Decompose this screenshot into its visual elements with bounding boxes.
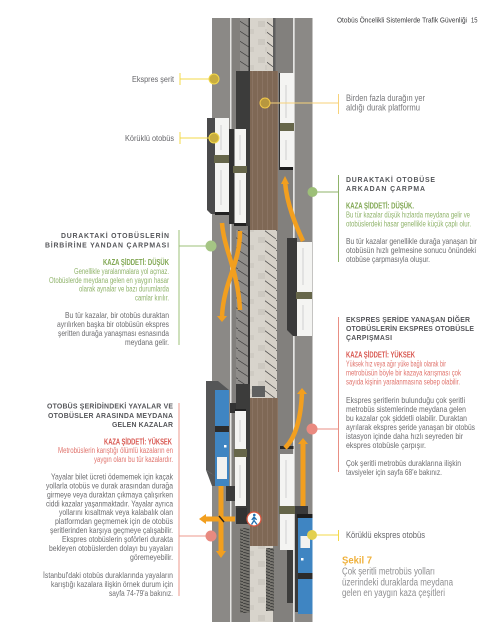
description: şeritten durağa yanaşması esnasında — [58, 328, 169, 338]
description: Bu tür kazalar, bir otobüs duraktan — [65, 310, 169, 320]
severity low: KAZA ŞİDDETİ: DÜŞÜK — [103, 258, 169, 267]
severity low: Otobüslerde meydana gelen en yaygın hasar — [49, 276, 169, 285]
figure caption: Şekil 7 — [342, 555, 372, 567]
callout: ekspres şerit: Ekspres şerit — [132, 74, 175, 84]
heading: ARKADAN ÇARPMA — [346, 186, 425, 193]
figure caption — [342, 555, 453, 599]
arrow: merging into express lane — [285, 388, 307, 448]
callout: durak platformu: aldığı durak platformu — [346, 102, 420, 112]
blue bus: left — [206, 381, 229, 486]
severity high: Yüksek hız veya ağır yüke bağlı olarak bir — [346, 360, 446, 369]
severity low: KAZA ŞİDDETİ: DÜŞÜK. — [346, 202, 414, 211]
heading: OTOBÜSLER ARASINDA MEYDANA — [48, 411, 173, 420]
recommendation reference: tavsiyeler için sayfa 68'e bakınız. — [346, 467, 442, 477]
articulated bus: upper left outer lane — [207, 118, 230, 215]
severity high — [58, 438, 173, 464]
description: metrobüs sistemlerinde meydana gelen — [346, 404, 466, 414]
description: meydana gelir. — [125, 337, 169, 347]
description: şeritlerinden karşıya geçmeye çalışabilir. — [50, 525, 173, 535]
articulated bus: lower left inner lane — [226, 409, 247, 524]
station platform bottom — [236, 398, 278, 622]
arrow: side-swipe crossing — [217, 223, 240, 322]
articulated bus: lower right inner lane — [279, 446, 295, 603]
page header: 15 — [471, 16, 478, 24]
case reference: karıştığı kazalara ilişkin örnek durum için — [51, 579, 173, 589]
callout: körüklü ekspres otobüs — [307, 529, 425, 541]
heading: EKSPRES ŞERİDE YANAŞAN DİĞER — [346, 315, 470, 324]
description: Ekspres otobüslerin şoförleri durakta — [62, 534, 173, 544]
road plan illustration — [199, 18, 312, 622]
recommendation reference: Çok şeritli metrobüs duraklarına ilişkin — [346, 458, 461, 468]
severity high: KAZA ŞİDDETİ: YÜKSEK — [346, 351, 415, 360]
description: platformdan geçmemek için de otobüs — [55, 516, 173, 526]
case reference: sayfa 74-79'a bakınız. — [109, 588, 173, 598]
arrow: rear-end collision at upper right — [281, 176, 303, 241]
station platform top — [236, 18, 278, 230]
severity low: olarak aynalar ve bazı durumlarda — [79, 285, 169, 294]
description: yollarla otobüs ve durak arasından durağa — [46, 480, 173, 490]
callout: durak platformu: Birden fazla durağın yer — [346, 92, 425, 103]
case reference: İstanbul'daki otobüs duraklarında yayaların — [43, 570, 173, 580]
heading: OTOBÜS ŞERİDİNDEKİ YAYALAR VE — [47, 402, 173, 411]
description: göremeyebilir. — [130, 552, 173, 562]
panel: ekspres çarpışma — [346, 315, 475, 477]
description: ciddi kazalar yaşanmaktadır. Yayalar ayrıca — [46, 498, 173, 508]
connector: express red — [306, 317, 338, 472]
description: istasyon içinde daha hızlı seyreden bir — [346, 431, 463, 441]
heading: BİRBİRİNE YANDAN ÇARPMASI — [45, 240, 169, 249]
figure caption: gelen en yaygın kaza çeşitleri — [342, 588, 445, 599]
icon: pedestrian sign — [247, 512, 261, 526]
severity low: Genellikle yaralanmalara yol açmaz. — [74, 267, 169, 276]
description: bu kazalar çok şiddetli olabilir. Duraktan — [346, 413, 467, 423]
case reference — [43, 570, 173, 598]
panel: yayalar ve otobüsler — [43, 402, 174, 598]
heading — [346, 315, 474, 342]
description — [46, 472, 174, 562]
connector: pedestrian red — [179, 403, 216, 596]
severity high: yaygın olanı bu tür kazalardır. — [94, 455, 173, 464]
figure caption: Çok şeritli metrobüs yolları — [342, 566, 435, 577]
heading: DURAKTAKİ OTOBÜSLERİN — [61, 231, 169, 240]
heading: ÇARPIŞMASI — [346, 335, 392, 342]
callout: durak platformu — [260, 92, 425, 114]
heading — [45, 231, 169, 249]
description: Yayalar bilet ücreti ödememek için kaçak — [51, 472, 174, 482]
heading — [47, 402, 173, 429]
figure caption: üzerindeki duraklarda meydana — [342, 577, 453, 588]
description: Ekspres şeritlerin bulunduğu çok şeritli — [346, 395, 465, 405]
callout: körüklü otobüs: Körüklü otobüs — [125, 133, 174, 143]
connector: side-swipe green — [179, 230, 216, 345]
description: ayrılırken başka bir otobüsün ekspres — [57, 319, 169, 329]
severity high: KAZA ŞİDDETİ: YÜKSEK — [104, 438, 172, 446]
panel: yandan çarpma — [45, 231, 169, 347]
articulated bus: upper right — [279, 73, 294, 170]
connector: rear-end green — [308, 175, 338, 262]
callout: ekspres şerit — [132, 73, 219, 85]
blue bus: lower right — [295, 506, 312, 614]
station platform middle — [230, 226, 277, 414]
description — [346, 236, 477, 264]
description: ekspres otobüsle çarpışır. — [346, 440, 426, 450]
description: girmeye veya duraktan çıkmaya çalışırken — [47, 490, 173, 500]
severity low — [346, 202, 471, 229]
arrow: pedestrian crossing conflict — [199, 486, 235, 558]
page header: Otobüs Öncelikli Sistemlerde Trafik Güvenliği — [337, 16, 467, 24]
heading — [346, 175, 435, 193]
heading: OTOBÜSLERİN EKSPRES OTOBÜSLE — [346, 324, 474, 333]
description — [346, 395, 475, 450]
description: yollarını kısaltmak veya kalabalık olan — [59, 507, 173, 517]
road surface — [212, 18, 312, 622]
description: bekleyen otobüslerden dolayı bu yayaları — [49, 543, 173, 553]
severity low: camlar kırılır. — [135, 294, 169, 302]
callout: körüklü otobüs — [125, 132, 219, 144]
severity high — [346, 351, 462, 387]
severity high: Metrobüslerin karıştığı ölümlü kazaların en — [58, 446, 173, 455]
articulated bus: right middle — [287, 238, 312, 336]
callout: körüklü ekspres otobüs: Körüklü ekspres otobüs — [346, 529, 425, 540]
description — [57, 310, 169, 347]
arrow: bus straight ahead — [298, 438, 308, 506]
heading: DURAKTAKİ OTOBÜSE — [346, 175, 435, 184]
articulated bus: upper left inner lane — [229, 129, 247, 226]
severity low — [49, 258, 169, 302]
description: otobüse çarpmasıyla oluşur. — [346, 254, 430, 264]
panel: arkadan çarpma — [346, 175, 477, 264]
recommendation reference — [346, 458, 461, 477]
heading: GELEN KAZALAR — [112, 422, 173, 429]
